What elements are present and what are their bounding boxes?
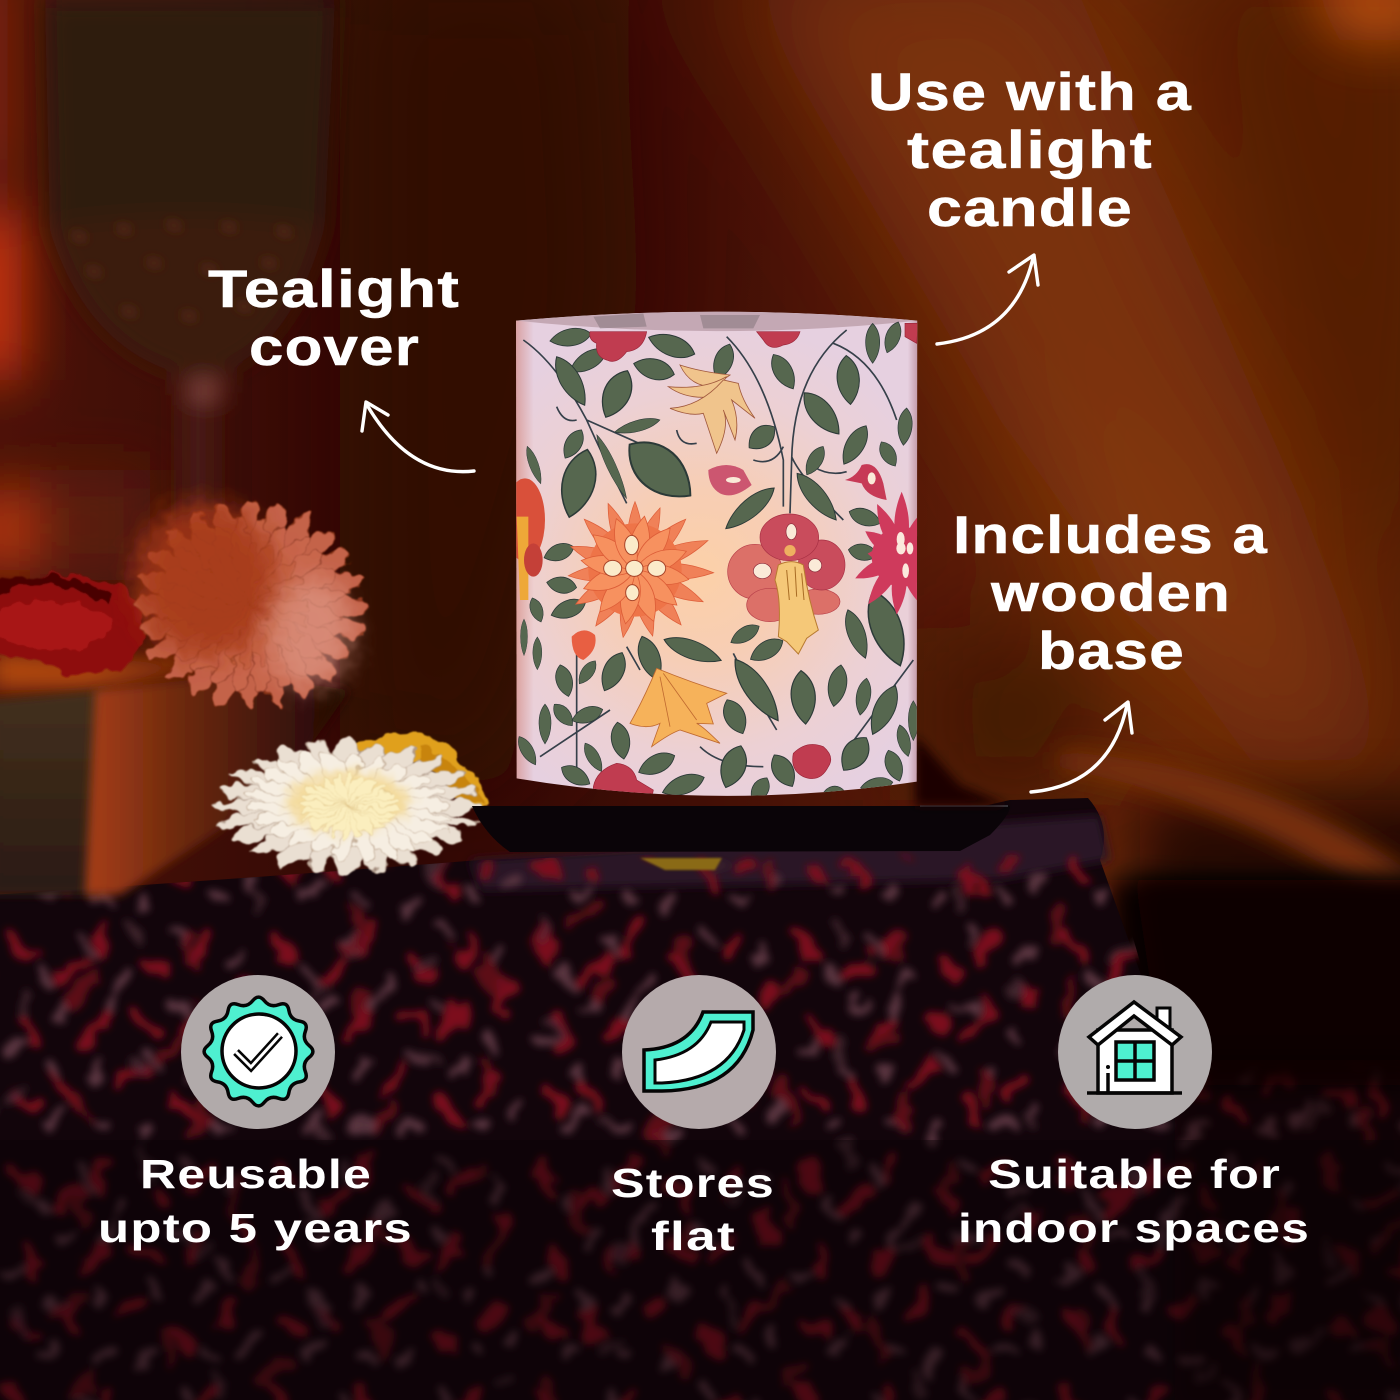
label: Includes a wooden base: wooden — [990, 564, 1231, 623]
green leaves — [514, 320, 918, 806]
left red glow — [0, 0, 1400, 580]
caption: stores flat: Stores — [611, 1160, 775, 1206]
caption: reusable upto 5 years — [98, 1151, 413, 1251]
top and bottom red blossoms — [590, 323, 918, 807]
caption: stores flat: flat — [651, 1213, 736, 1259]
cloth flecks pattern — [0, 860, 1400, 1400]
icon: house for indoor spaces — [1058, 975, 1212, 1129]
warm glow and inner rim — [513, 300, 920, 813]
right side cloth shadow — [1135, 880, 1400, 1085]
right crimson flower — [855, 492, 917, 614]
icon: reusable badge — [181, 975, 335, 1129]
label: Use with a tealight candle: tealight — [907, 121, 1153, 180]
peach chrysanthemum — [133, 500, 367, 710]
red rose — [0, 574, 145, 673]
drape lower streak and shadow — [1060, 750, 1400, 1400]
buds — [572, 464, 887, 660]
caption: suitable for indoor spaces — [958, 1151, 1310, 1251]
label: Tealight cover: cover — [249, 318, 420, 377]
label: Includes a wooden base: base — [1038, 622, 1185, 681]
yellow lily top — [668, 365, 755, 453]
label: Tealight cover: Tealight — [208, 260, 460, 319]
floral tealight cover — [516, 312, 918, 796]
label: Tealight cover — [208, 260, 460, 377]
wine glass — [45, 0, 335, 520]
crimson bell flower — [728, 514, 845, 654]
drape folds — [340, 0, 1400, 800]
label: Use with a tealight candle: Use with a — [868, 63, 1192, 122]
caption: reusable upto 5 years: upto 5 years — [98, 1205, 413, 1251]
wine glass contents speckle — [75, 224, 288, 317]
yellow marigold — [352, 732, 490, 810]
arrow: to tealight cover — [362, 402, 474, 472]
vines — [523, 330, 913, 777]
label: Use with a tealight candle: candle — [927, 179, 1133, 238]
caption: suitable for indoor spaces: Suitable for — [988, 1151, 1281, 1197]
white chrysanthemum — [214, 738, 482, 874]
label: Includes a wooden base — [953, 506, 1268, 681]
arrow: to wooden base — [1031, 702, 1132, 792]
caption: stores flat — [611, 1160, 775, 1259]
gift box — [0, 640, 350, 895]
orange dahlia flower — [568, 500, 714, 639]
arrow: to tealight candle — [937, 255, 1038, 344]
icon: stores flat curved sheet — [622, 975, 776, 1129]
caption: suitable for indoor spaces: indoor spaces — [958, 1205, 1310, 1251]
table with patterned cloth — [0, 798, 1400, 1400]
yellow lily bottom — [630, 668, 727, 747]
label: Includes a wooden base: Includes a — [953, 506, 1268, 565]
left edge red flower — [516, 478, 545, 600]
wooden base plate — [472, 735, 1010, 870]
caption: reusable upto 5 years: Reusable — [140, 1151, 372, 1197]
label: Use with a tealight candle — [868, 63, 1192, 238]
lower darkening band — [0, 1140, 1400, 1400]
